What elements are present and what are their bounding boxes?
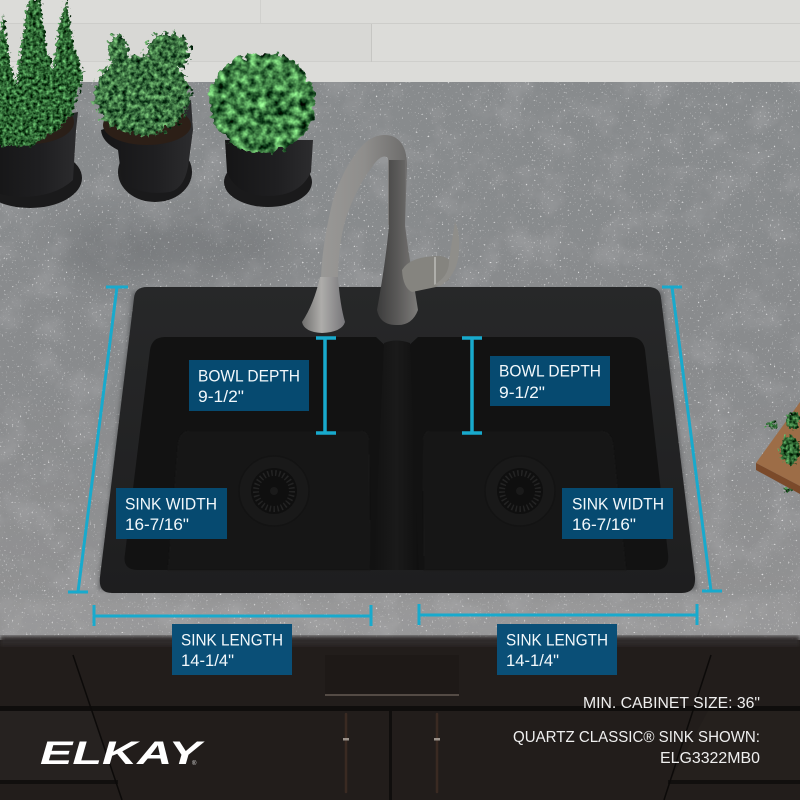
right bowl floor <box>423 431 626 570</box>
callout: right sink length <box>497 624 617 675</box>
icon: cabinet door handles <box>343 714 440 792</box>
right bowl <box>404 337 668 570</box>
callout: left sink width: 16-7/16" <box>125 516 189 534</box>
callout: left sink width <box>116 488 227 539</box>
faucet handle <box>402 256 452 292</box>
icon: right drain <box>485 456 555 526</box>
center ridge <box>374 340 419 570</box>
callout: left bowl depth: 9-1/2" <box>198 388 244 406</box>
dimension: right sink length line <box>419 604 697 625</box>
icon: faucet <box>302 135 459 333</box>
icon: left drain <box>239 456 309 526</box>
callout: right sink length: SINK LENGTH <box>506 632 608 650</box>
callout: right sink width <box>562 488 673 539</box>
dimension: left sink width line <box>68 287 128 592</box>
callout: left bowl depth: BOWL DEPTH <box>198 368 300 386</box>
sink shadow <box>98 291 697 590</box>
dimension: right sink width line <box>662 287 722 591</box>
background: stone countertop <box>0 82 800 642</box>
icon: cabinet drawer pull <box>325 655 459 695</box>
callout: right bowl depth <box>490 356 610 406</box>
callout: right bowl depth: BOWL DEPTH <box>499 362 601 380</box>
callout: left sink length: 14-1/4" <box>181 652 234 670</box>
logo: Elkay: ® <box>192 760 197 767</box>
left bowl floor <box>168 431 370 570</box>
plant: parsley in black pot <box>94 33 193 202</box>
text: model shown: ELG3322MB0 <box>660 750 760 767</box>
callout: right sink width: 16-7/16" <box>572 516 636 534</box>
sink: drop-in basin <box>98 287 697 593</box>
sink deck <box>100 287 695 593</box>
callout: right bowl depth: 9-1/2" <box>499 384 545 402</box>
background: dark cabinets <box>0 636 800 800</box>
callout: left bowl depth <box>189 360 309 411</box>
logo: Elkay <box>40 735 205 771</box>
faucet body <box>377 160 418 325</box>
callout: left sink length <box>172 624 292 675</box>
plant: ivy in black pot <box>209 53 315 207</box>
text: model shown: QUARTZ CLASSIC® SINK SHOWN: <box>513 729 760 746</box>
callout: left sink length: SINK LENGTH <box>181 632 283 650</box>
dimension: left sink length line <box>94 605 371 626</box>
dimension: right bowl depth line <box>462 338 482 433</box>
text: model shown <box>513 729 760 767</box>
dimension: left bowl depth line <box>316 338 336 433</box>
text: minimum cabinet size: MIN. CABINET SIZE: 36" <box>583 695 760 712</box>
cutting board with herbs <box>756 402 800 494</box>
left bowl <box>125 337 390 570</box>
callout: right sink length: 14-1/4" <box>506 652 559 670</box>
background: wood floor <box>0 0 800 84</box>
faucet sprayer cone <box>302 277 345 333</box>
plant: rosemary in black pot <box>0 0 84 208</box>
callout: left sink width: SINK WIDTH <box>125 496 217 514</box>
faucet spout <box>321 135 407 278</box>
logo: Elkay: ELKAY <box>40 735 205 771</box>
callout: right sink width: SINK WIDTH <box>572 496 664 514</box>
